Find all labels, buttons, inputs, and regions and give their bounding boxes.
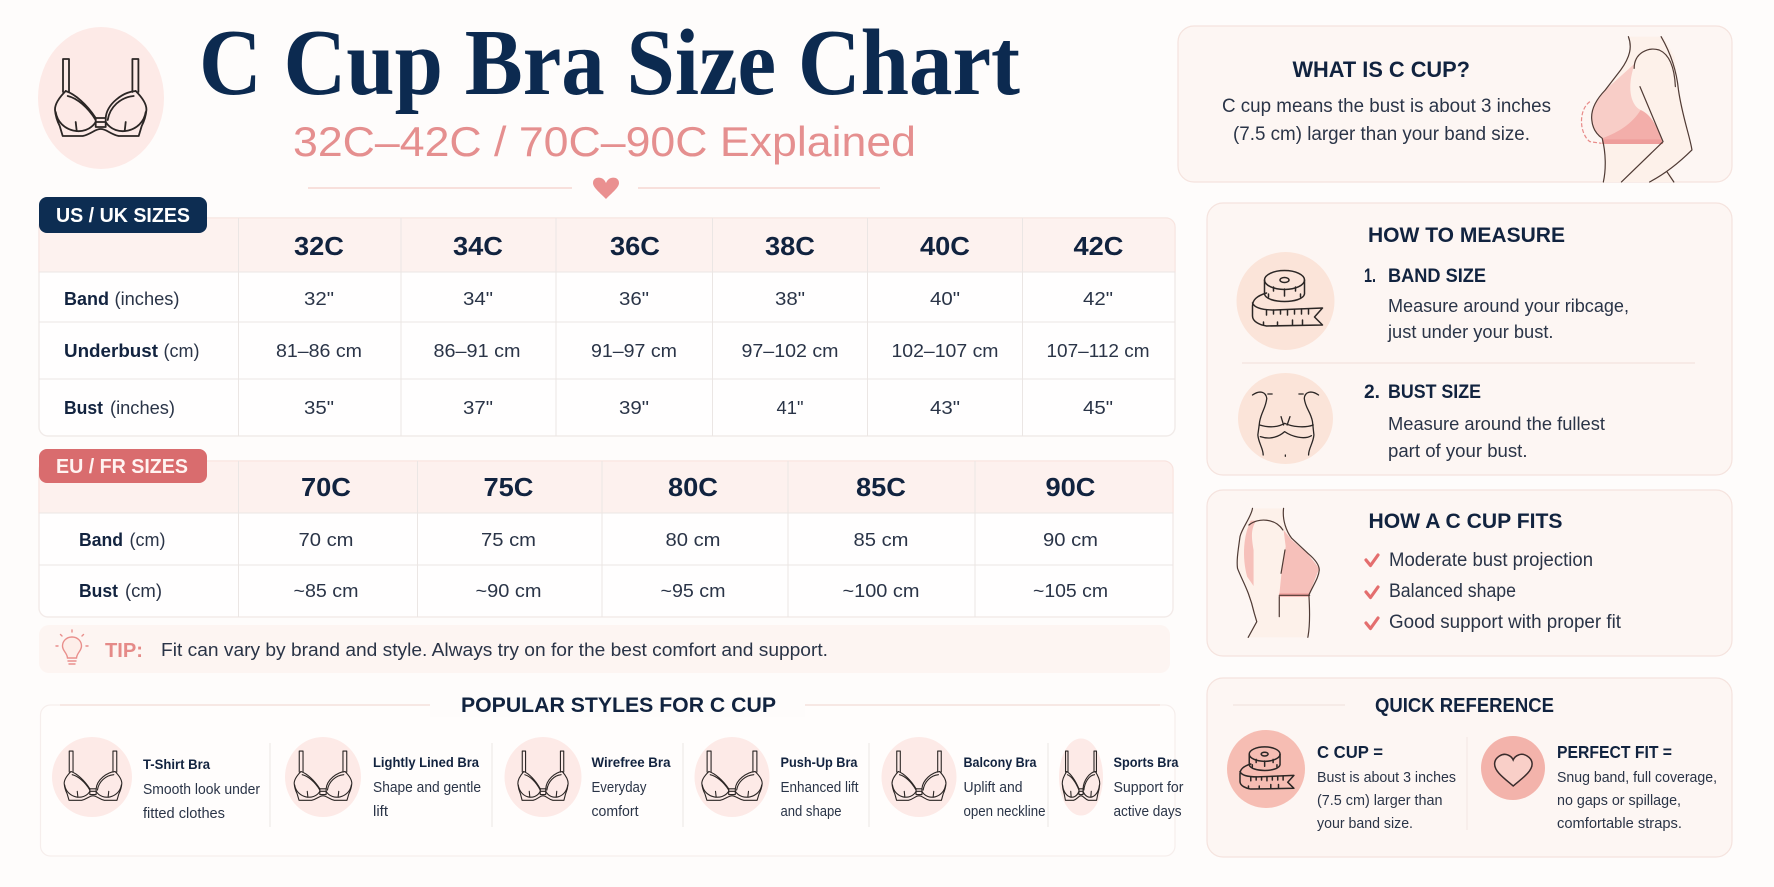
column headers: 34C (453, 231, 503, 261)
row: underbust cm: 102–107 cm (892, 341, 998, 361)
badge: EU / FR sizes: EU / FR SIZES (56, 456, 188, 478)
panel background (1207, 678, 1732, 857)
row: underbust cm (64, 341, 1150, 361)
row: bust inches: (inches) (110, 398, 175, 418)
step 2: bust size: 2. (1364, 382, 1380, 403)
panel: quick reference (1207, 678, 1732, 857)
heading: QUICK REFERENCE (1375, 694, 1554, 717)
heading: WHAT IS C CUP? (1292, 57, 1470, 82)
table header band (39, 461, 1173, 513)
checklist: Balanced shape (1389, 581, 1516, 602)
row: band inches: 42" (1083, 289, 1113, 309)
icon: bust measurement (1238, 373, 1333, 464)
style: t-shirt bra: Smooth look under (143, 782, 260, 798)
tip banner (39, 625, 1170, 673)
row: band inches: 40" (930, 289, 960, 309)
row: bust inches: 37" (463, 398, 493, 418)
C cup definition: (7.5 cm) larger than (1317, 792, 1442, 809)
row: band inches: 34" (463, 289, 493, 309)
row: bust cm: ~85 cm (294, 581, 358, 601)
row: bust inches: 39" (619, 398, 649, 418)
style: balcony bra: Balcony Bra (964, 754, 1037, 770)
column headers (301, 472, 1096, 502)
column headers: 80C (668, 472, 718, 502)
style: push-up bra: and shape (780, 804, 842, 820)
row: band inches: 36" (619, 289, 649, 309)
column headers (294, 231, 1124, 261)
badge: US / UK sizes (39, 197, 207, 233)
heading: HOW A C CUP FITS (1368, 509, 1562, 533)
illustration: side profile with bust measure (1581, 37, 1692, 182)
panel: what is C cup (1178, 26, 1732, 182)
C cup definition: C CUP = (1317, 742, 1383, 762)
style: push-up bra (694, 737, 858, 820)
column headers: 42C (1074, 231, 1124, 261)
style: balcony bra: open neckline (964, 804, 1046, 820)
perfect fit definition: PERFECT FIT = (1557, 742, 1672, 762)
description: C cup means the bust is about 3 inches (1222, 96, 1551, 117)
row: band inches: 38" (775, 289, 805, 309)
perfect fit definition: Snug band, full coverage, (1557, 769, 1717, 786)
row: band cm: 85 cm (854, 530, 908, 550)
row: bust inches (64, 398, 1113, 418)
row: underbust cm: 91–97 cm (591, 341, 677, 361)
row: band inches: 32" (304, 289, 334, 309)
style: lightly lined bra: lift (373, 804, 388, 820)
panel: how a C cup fits (1207, 490, 1732, 656)
icon: tape measure (1227, 730, 1305, 808)
row: underbust cm: 107–112 cm (1046, 341, 1150, 361)
row: underbust cm: (cm) (164, 341, 200, 361)
column headers: 85C (856, 472, 906, 502)
row: band cm: (cm) (130, 530, 166, 550)
row: bust inches: 43" (930, 398, 960, 418)
panel background (1178, 26, 1732, 182)
panel: popular styles (40, 694, 1184, 856)
table: US / UK sizes (39, 218, 1175, 436)
step 1: band size: just under your bust. (1387, 322, 1554, 342)
step 2: bust size (1364, 382, 1605, 461)
table grid (39, 461, 1173, 617)
row: underbust cm: Underbust (64, 341, 158, 361)
style: push-up bra: Enhanced lift (780, 780, 858, 796)
heading: HOW TO MEASURE (1368, 223, 1565, 247)
popular styles heading (60, 694, 1160, 717)
style: lightly lined bra: Shape and gentle (373, 780, 481, 796)
checklist (1366, 550, 1622, 633)
C cup definition: Bust is about 3 inches (1317, 769, 1456, 786)
icon: heart (1481, 736, 1545, 800)
title: C Cup Bra Size Chart (199, 11, 1020, 115)
row: band cm: Band (79, 530, 123, 550)
row: underbust cm: 97–102 cm (742, 341, 838, 361)
tip label: TIP: (105, 640, 143, 662)
column headers: 90C (1046, 472, 1096, 502)
column headers: 36C (610, 231, 660, 261)
panel: how to measure (1207, 203, 1732, 475)
checklist: Moderate bust projection (1389, 550, 1593, 571)
row: bust cm: Bust (79, 581, 118, 601)
step 2: bust size: BUST SIZE (1388, 382, 1481, 403)
step 1: band size: BAND SIZE (1388, 266, 1486, 287)
style: t-shirt bra (52, 737, 260, 822)
C cup definition (1317, 742, 1456, 832)
style: wirefree bra: comfort (592, 804, 638, 820)
illustration: side profile (1237, 508, 1319, 637)
C cup definition: your band size. (1317, 815, 1413, 832)
row: band cm: 70 cm (298, 530, 354, 550)
tip text: Fit can vary by brand and style. Always try on for the best comfort and support. (161, 639, 828, 660)
row: bust inches: 35" (304, 398, 334, 418)
style: balcony bra: Uplift and (964, 780, 1022, 796)
table background (39, 461, 1173, 617)
header icon: bra in circle (38, 27, 164, 169)
perfect fit definition (1557, 742, 1717, 832)
row: bust inches: 45" (1083, 398, 1113, 418)
icon: tape measure (1236, 252, 1334, 350)
row: band inches: (inches) (114, 289, 180, 309)
style: sports bra: active days (1114, 804, 1182, 820)
icon: light bulb (56, 630, 88, 664)
table grid (39, 218, 1175, 436)
column headers: 38C (765, 231, 815, 261)
heart divider (308, 178, 880, 199)
perfect fit definition: comfortable straps. (1557, 815, 1682, 832)
style: t-shirt bra: fitted clothes (143, 806, 225, 822)
row: bust inches: 41" (776, 398, 804, 418)
row: band cm (79, 530, 1098, 550)
style: t-shirt bra: T-Shirt Bra (143, 756, 210, 772)
step 2: bust size: part of your bust. (1388, 441, 1528, 461)
column headers: 75C (484, 472, 534, 502)
row: underbust cm: 86–91 cm (434, 341, 520, 361)
row: underbust cm: 81–86 cm (276, 341, 362, 361)
step 2: bust size: Measure around the fullest (1388, 414, 1605, 434)
table background (39, 218, 1175, 436)
style: wirefree bra (504, 737, 671, 820)
table: EU / FR sizes (39, 461, 1173, 617)
row: bust cm: ~95 cm (660, 581, 726, 601)
table header band (39, 218, 1175, 272)
row: band cm: 90 cm (1043, 530, 1098, 550)
perfect fit definition: no gaps or spillage, (1557, 792, 1681, 809)
row: bust cm: ~105 cm (1033, 581, 1108, 601)
subtitle: 32C–42C / 70C–90C Explained (293, 118, 916, 165)
style: balcony bra (882, 737, 1046, 820)
popular styles heading: POPULAR STYLES FOR C CUP (461, 694, 776, 717)
style: lightly lined bra (285, 737, 481, 820)
step 1: band size: Measure around your ribcage, (1388, 296, 1629, 316)
style: sports bra: Sports Bra (1114, 754, 1179, 770)
row: bust cm: ~90 cm (476, 581, 542, 601)
row: bust cm: ~100 cm (842, 581, 920, 601)
description (1222, 96, 1551, 145)
style: lightly lined bra: Lightly Lined Bra (373, 754, 479, 770)
badge: EU / FR sizes (39, 449, 207, 483)
panel background (1207, 490, 1732, 656)
column headers: 32C (294, 231, 344, 261)
row: bust cm: (cm) (125, 581, 162, 601)
row: band cm: 75 cm (481, 530, 536, 550)
style: wirefree bra: Everyday (592, 780, 647, 796)
style: push-up bra: Push-Up Bra (780, 754, 858, 770)
row: band cm: 80 cm (666, 530, 720, 550)
row: bust cm (79, 581, 1108, 601)
style: sports bra (1059, 738, 1184, 820)
row: bust inches: Bust (64, 398, 103, 418)
panel background (40, 705, 1175, 856)
style: sports bra: Support for (1114, 780, 1184, 796)
checklist: Good support with proper fit (1389, 612, 1622, 633)
step 1: band size: 1. (1364, 266, 1376, 287)
panel background (1207, 203, 1732, 475)
step 1: band size (1364, 266, 1629, 342)
description: (7.5 cm) larger than your band size. (1233, 124, 1530, 145)
column headers: 40C (920, 231, 970, 261)
badge: US / UK sizes: US / UK SIZES (56, 205, 190, 227)
row: band inches: Band (64, 289, 109, 309)
column headers: 70C (301, 472, 351, 502)
row: band inches (64, 289, 1113, 309)
style: wirefree bra: Wirefree Bra (592, 754, 671, 770)
